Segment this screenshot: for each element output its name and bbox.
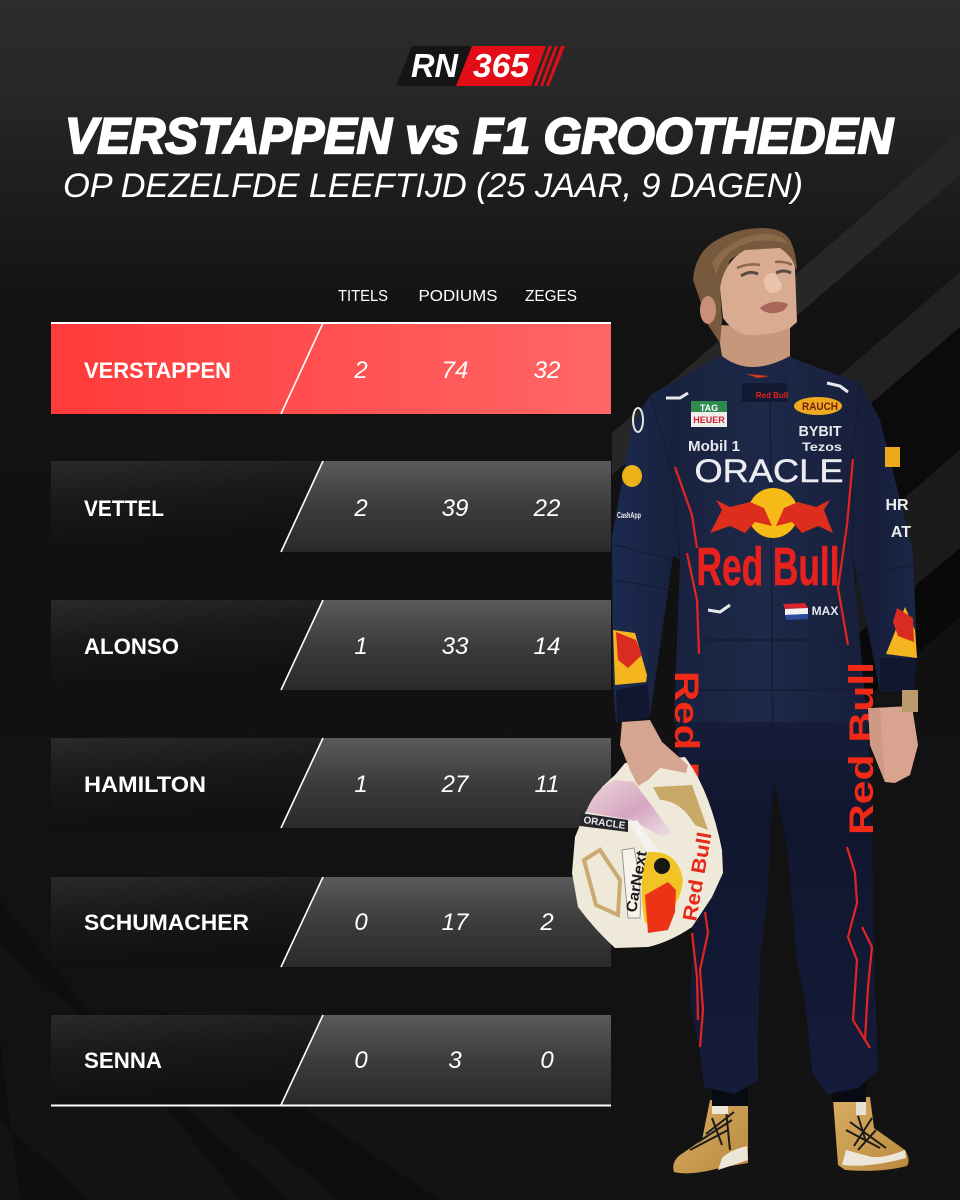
row: Vettel: 2 bbox=[353, 495, 368, 522]
row: Verstappen bbox=[51, 322, 611, 414]
suit quilting and seams bbox=[614, 383, 915, 777]
row: Schumacher: SCHUMACHER bbox=[84, 910, 249, 935]
suit sponsor logos: BYBIT bbox=[798, 423, 842, 440]
row: Senna: 0 bbox=[354, 1047, 368, 1074]
row: Verstappen: 2 bbox=[353, 357, 368, 384]
row: Verstappen: 74 bbox=[442, 357, 468, 384]
face bbox=[720, 248, 797, 335]
right hand overlap bbox=[868, 708, 885, 782]
left shoe bbox=[673, 1100, 748, 1173]
right hand bbox=[870, 706, 918, 783]
suit sponsor logos: Mobil 1 bbox=[688, 438, 740, 455]
table column headers: TITELS bbox=[338, 288, 388, 305]
sleeve logos bbox=[617, 408, 911, 541]
row: Vettel: 22 bbox=[533, 495, 560, 522]
watch bbox=[877, 690, 918, 712]
row: Senna: 3 bbox=[448, 1047, 462, 1074]
row: Vettel bbox=[51, 461, 611, 552]
logo: RN 365: 365 bbox=[473, 47, 530, 84]
helmet: Red Bull bbox=[679, 830, 717, 923]
neck bbox=[717, 325, 790, 367]
sleeve logos: HR bbox=[885, 497, 909, 514]
row: Senna: SENNA bbox=[84, 1048, 162, 1073]
sleeve logos: CashApp bbox=[617, 511, 641, 520]
subtitle: OP DEZELFDE LEEFTIJD (25 JAAR, 9 DAGEN) bbox=[63, 167, 803, 205]
row: Alonso: 1 bbox=[354, 633, 368, 660]
collar emblem and tab: Red Bull bbox=[756, 391, 788, 400]
title: VERSTAPPEN vs F1 GROOTHEDEN bbox=[65, 108, 894, 164]
row: Senna bbox=[51, 1015, 611, 1106]
sleeve logos: AT bbox=[891, 524, 911, 541]
table column headers bbox=[338, 288, 577, 305]
ankle cuffs bbox=[712, 1082, 866, 1106]
row: Verstappen: 32 bbox=[534, 357, 560, 384]
red bull emblem bbox=[710, 488, 833, 538]
row: Schumacher: 0 bbox=[354, 909, 368, 936]
suit sponsor logos bbox=[688, 397, 844, 618]
logo: RN 365: RN bbox=[411, 47, 459, 84]
row: Alonso: ALONSO bbox=[84, 634, 179, 659]
nose and lips bbox=[764, 273, 782, 293]
table column headers: ZEGES bbox=[525, 288, 577, 305]
suit sponsor logos: TAG bbox=[700, 403, 718, 413]
piping lines bbox=[675, 459, 872, 1048]
row: Schumacher bbox=[51, 877, 611, 967]
torso and arms suit bbox=[612, 356, 917, 722]
row: Hamilton: 27 bbox=[441, 771, 470, 798]
row: Hamilton: 1 bbox=[354, 771, 368, 798]
suit sponsor logos: HEUER bbox=[693, 415, 725, 425]
collar bbox=[720, 350, 792, 384]
row: Schumacher: 17 bbox=[442, 909, 470, 936]
row: Alonso: 33 bbox=[442, 633, 469, 660]
row: Hamilton: 11 bbox=[535, 771, 559, 798]
sleeve bull badges bbox=[613, 607, 917, 685]
left hand bbox=[620, 720, 688, 786]
row: Hamilton bbox=[51, 738, 611, 828]
driver figure bbox=[572, 228, 918, 1173]
collar emblem and tab bbox=[742, 374, 788, 402]
suit sponsor logos: Tezos bbox=[802, 440, 842, 454]
helmet: ORACLE bbox=[583, 815, 626, 832]
logo: RN 365 bbox=[396, 46, 565, 86]
helmet bbox=[572, 757, 723, 948]
suit sponsor logos: Red Bull bbox=[696, 537, 840, 597]
table column headers: PODIUMS bbox=[418, 288, 498, 305]
cuffs bbox=[616, 658, 917, 722]
suit sponsor logos: ORACLE bbox=[694, 453, 844, 489]
ear bbox=[700, 296, 716, 324]
row: Vettel: 39 bbox=[442, 495, 468, 522]
row: Hamilton: HAMILTON bbox=[84, 772, 206, 797]
eyebrows and eyes bbox=[737, 262, 792, 276]
right shoe bbox=[833, 1097, 909, 1171]
row: Vettel: VETTEL bbox=[84, 496, 164, 521]
suit sponsor logos: RAUCH bbox=[802, 401, 838, 413]
row: Senna: 0 bbox=[540, 1047, 554, 1074]
row: Verstappen: VERSTAPPEN bbox=[84, 358, 231, 383]
hair bbox=[693, 228, 797, 343]
left leg bbox=[674, 700, 773, 1094]
row: Alonso bbox=[51, 600, 611, 690]
leg red bull lettering bbox=[667, 662, 881, 841]
right leg bbox=[762, 700, 878, 1094]
leg red bull lettering: Red Bull bbox=[667, 671, 705, 841]
row: Alonso: 14 bbox=[534, 633, 560, 660]
leg red bull lettering: Red Bull bbox=[843, 662, 881, 835]
dutch flag bbox=[783, 603, 808, 620]
puma marks bbox=[666, 383, 848, 612]
helmet: CarNext bbox=[623, 850, 651, 914]
suit sponsor logos: MAX bbox=[812, 604, 838, 618]
row: Schumacher: 2 bbox=[539, 909, 554, 936]
